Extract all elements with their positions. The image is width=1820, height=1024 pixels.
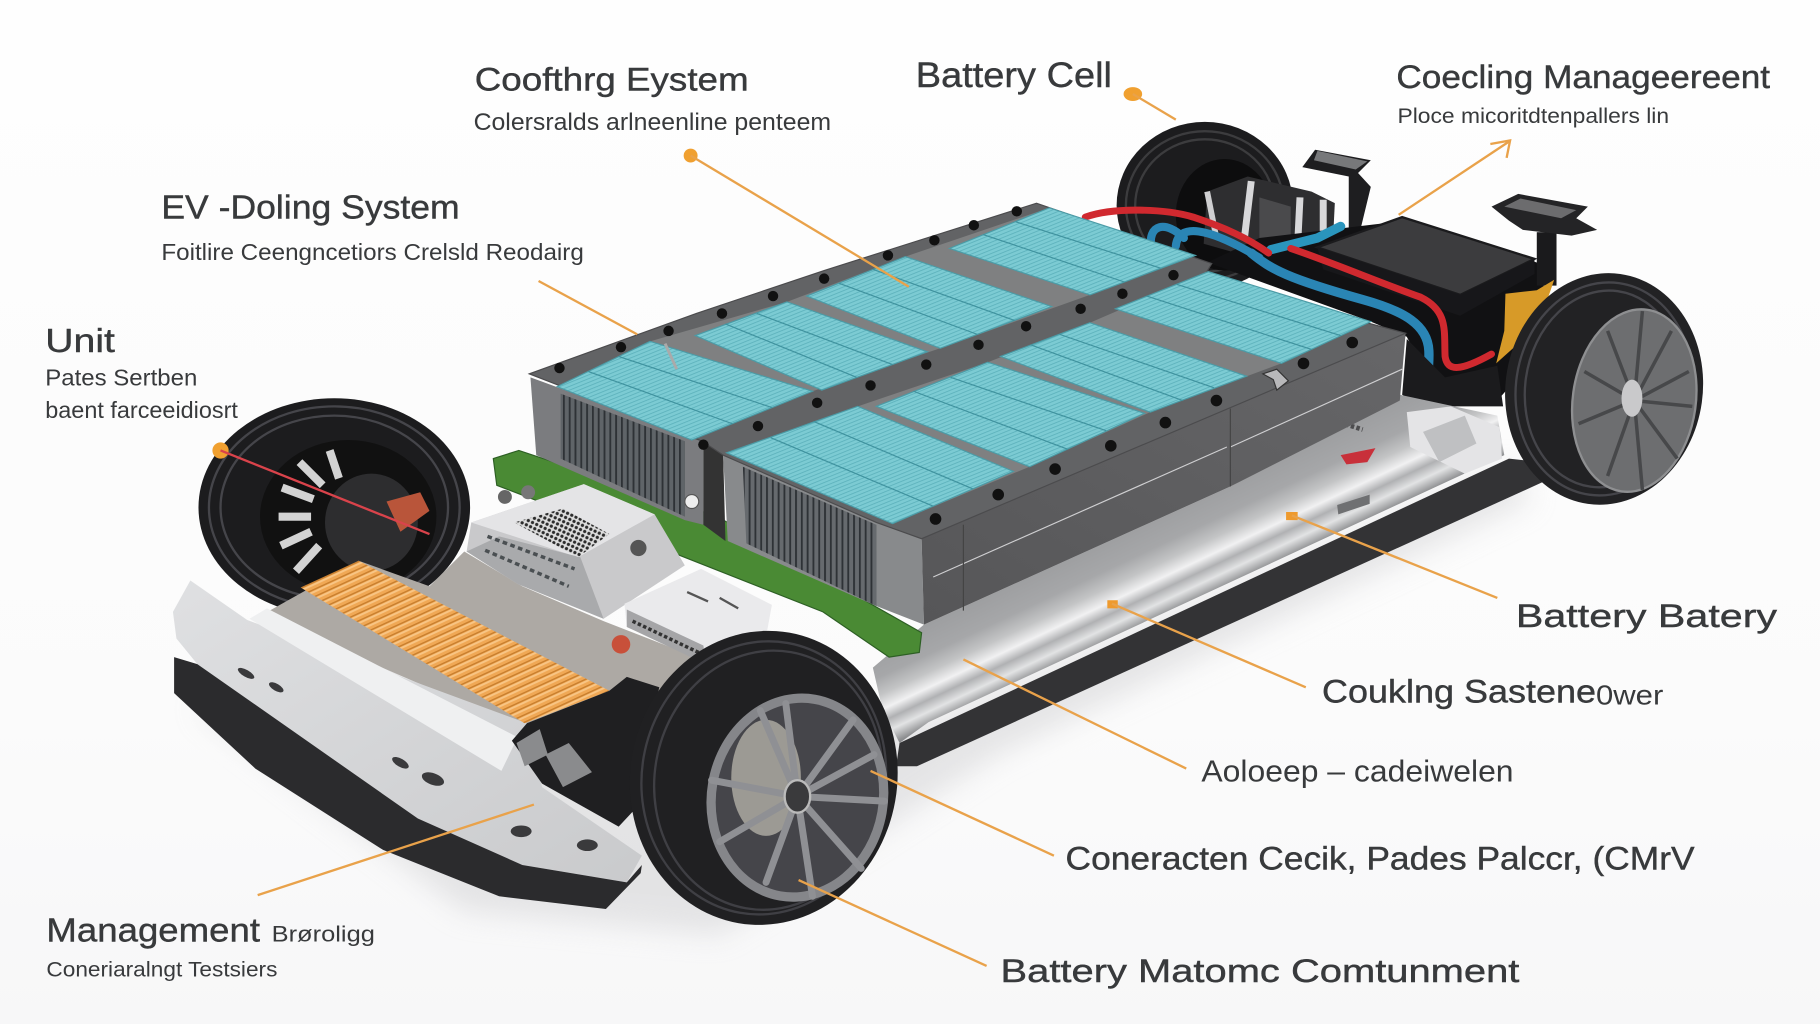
left block front wall	[530, 377, 703, 525]
front bumper	[173, 580, 642, 882]
label: coneracten: Coneracten Cecik, Pades Palccr, (CMrV	[1066, 841, 1695, 877]
cell panels front row	[727, 272, 1371, 524]
front gray floor	[261, 551, 743, 729]
front white module	[467, 484, 685, 619]
EV chassis illustration	[173, 87, 1718, 966]
bracket metal detail	[517, 729, 592, 787]
leader: cooling system	[684, 149, 909, 287]
suspension post and top mount	[1492, 194, 1597, 286]
bumper vents	[236, 666, 598, 851]
lower skirt	[174, 657, 642, 909]
front white box	[624, 569, 772, 664]
leader: battery module	[799, 880, 987, 966]
leader: management	[258, 805, 534, 895]
block gap	[703, 441, 725, 541]
front block wall	[723, 455, 924, 625]
frame bolts	[554, 206, 1358, 525]
label: unit: Unit	[45, 323, 116, 360]
leader: unit	[212, 442, 429, 534]
rear right wheel	[1490, 260, 1718, 518]
orange radiator	[301, 561, 609, 723]
rear wiring bay	[1402, 339, 1503, 406]
label: EV system	[161, 189, 584, 265]
leader: aoloeep	[963, 659, 1186, 769]
label: EV system: Foitlire Ceengncetiors Crelsld Reodairg	[161, 239, 584, 265]
sill chrome collar	[1423, 416, 1476, 462]
sill nameplate	[1337, 495, 1370, 514]
battery pack	[529, 203, 1406, 625]
label: EV system: EV -Doling System	[161, 189, 460, 226]
cell panels back row	[557, 208, 1196, 440]
indicator dot	[685, 495, 699, 509]
label: cooling power: 0wer	[1596, 680, 1663, 711]
silver side sill	[873, 395, 1504, 743]
label: cooling management: Ploce micoritdtenpallers lin	[1398, 105, 1669, 128]
front radiator fins	[743, 467, 876, 606]
label: cooling system: Colersralds arlneenline penteem	[474, 109, 831, 136]
chain link	[1263, 369, 1288, 390]
label: unit: Pates Sertben	[45, 364, 197, 390]
probe pin	[665, 344, 677, 369]
box lower side	[1317, 247, 1534, 316]
label: cooling system	[474, 62, 831, 136]
yellow bracket	[1496, 280, 1554, 363]
black equipment bay	[1207, 221, 1544, 401]
white bumper bar	[250, 608, 518, 771]
green mounting plate	[493, 450, 922, 657]
label: management: Brørolіgg	[272, 922, 375, 947]
red connector	[1341, 448, 1375, 464]
wiring harness	[1273, 380, 1363, 430]
label: unit	[45, 323, 238, 423]
label: battery cell: Battery Cell	[916, 56, 1112, 95]
front left tire	[198, 398, 470, 616]
rear far tire	[1117, 122, 1293, 289]
label: unit: baent farceeidiosrt	[45, 397, 238, 423]
label: management: Coneriaralngt Testsiers	[46, 958, 277, 981]
label: management: Management	[46, 913, 261, 950]
label: cooling management: Coecling Manageereent	[1396, 59, 1770, 95]
lower black rail	[896, 459, 1561, 766]
leader: battery cell	[1124, 87, 1176, 120]
leader: battery	[1286, 512, 1497, 598]
label: cooling management	[1396, 59, 1770, 128]
leader: coneracten	[871, 771, 1054, 856]
label: cooling power	[1322, 673, 1663, 711]
label: cooling power: Couklng Sastene	[1322, 673, 1596, 709]
groove trays	[557, 208, 1371, 524]
leader lines	[212, 87, 1510, 966]
leader: cooling power	[1107, 600, 1306, 687]
label: aoloeep: Aoloeep – cadeiwelen	[1201, 755, 1514, 788]
black front bracket	[512, 677, 659, 827]
black control box	[1317, 217, 1534, 295]
front right wheel	[607, 609, 921, 946]
top frame	[529, 203, 1406, 539]
wall seams	[933, 369, 1402, 577]
red capacitor	[612, 635, 630, 654]
heat sink grid	[514, 509, 609, 557]
label: cooling system: Coofthrg Eystem	[475, 62, 749, 98]
leader: EV system	[539, 281, 637, 334]
left radiator fins	[561, 394, 685, 517]
label: battery: Battery Batery	[1516, 598, 1778, 634]
label: battery module: Battery Matomc Comtunment	[1001, 953, 1519, 989]
label: management	[46, 913, 375, 981]
soft ground shadow	[197, 464, 1532, 935]
rear electronics assembly	[1204, 150, 1544, 401]
panel divider lines	[588, 222, 1341, 506]
arrow: cooling management	[1399, 140, 1510, 215]
coolant and power cables	[1085, 210, 1492, 394]
long side wall	[922, 333, 1406, 625]
sill end fitting	[1407, 406, 1502, 474]
